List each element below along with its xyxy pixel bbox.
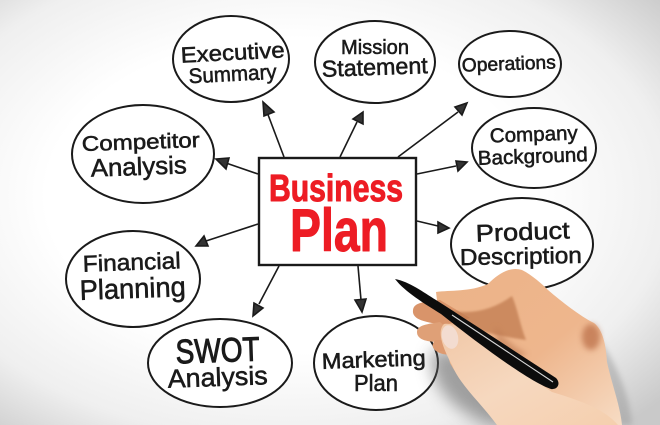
central box: Business Plan: Plan [290, 197, 388, 264]
bubble: Operations [459, 31, 561, 97]
arrow: to Marketing Plan [355, 266, 366, 312]
bubble: Mission Statement: Statement [321, 52, 429, 82]
bubble: Financial Planning: Planning [79, 271, 186, 306]
bubble: Executive Summary: Executive [180, 37, 285, 68]
arrow: to Operations [398, 103, 467, 157]
bubble: Company Background: Background [477, 144, 588, 170]
arrow: to Financial Planning [196, 224, 258, 246]
index finger shadow [442, 296, 526, 340]
ring finger [417, 322, 455, 342]
arrow: to SWOT Analysis [253, 266, 279, 316]
little finger [433, 340, 456, 355]
finger crease [495, 326, 528, 362]
arrow: to Company Background [417, 161, 467, 174]
bubble: Competitor Analysis: Analysis [90, 151, 187, 183]
bubble: Mission Statement [315, 21, 435, 103]
bubble: Marketing Plan [314, 316, 438, 410]
icon: hand holding pen [395, 269, 622, 425]
pen highlight [452, 315, 553, 382]
bubble: Competitor Analysis [72, 105, 214, 203]
palm and back of hand [436, 269, 622, 425]
hand shadow [431, 350, 540, 425]
central box: Business Plan: Business [269, 168, 403, 210]
bubble: Marketing Plan: Marketing [321, 345, 426, 374]
bubble: Financial Planning: Financial [82, 247, 181, 277]
bubble: SWOT Analysis [148, 319, 292, 407]
pen [395, 279, 558, 389]
arrows from central box to bubbles [196, 102, 467, 316]
middle finger [413, 300, 470, 325]
arrow: to Executive Summary [263, 102, 284, 157]
bubble: Operations: Operations [461, 52, 556, 77]
arrow: to Competitor Analysis [216, 158, 258, 174]
arrow: to Product Description [417, 221, 449, 233]
bubble: Company Background: Company [489, 122, 578, 148]
thumb [441, 324, 618, 425]
bubble: Financial Planning [66, 231, 200, 327]
bubble: Product Description [451, 198, 593, 290]
bubble: Product Description: Description [460, 242, 582, 270]
bubble: Marketing Plan: Plan [354, 370, 398, 396]
bubble: Executive Summary [173, 16, 289, 102]
bubble: Company Background [472, 108, 596, 188]
bubble: Product Description: Product [475, 217, 571, 248]
bubble: Mission Statement: Mission [341, 37, 409, 59]
bubble: Competitor Analysis: Competitor [81, 129, 200, 156]
bubble: SWOT Analysis: Analysis [167, 360, 268, 394]
knuckle shade [582, 324, 600, 350]
bubble: Executive Summary: Summary [188, 61, 278, 88]
hand shadow right [600, 340, 632, 425]
bubble: SWOT Analysis: SWOT [175, 331, 260, 371]
thumb nail [439, 323, 461, 351]
arrow: to Mission Statement [340, 112, 363, 157]
central box: Business Plan [259, 158, 416, 265]
